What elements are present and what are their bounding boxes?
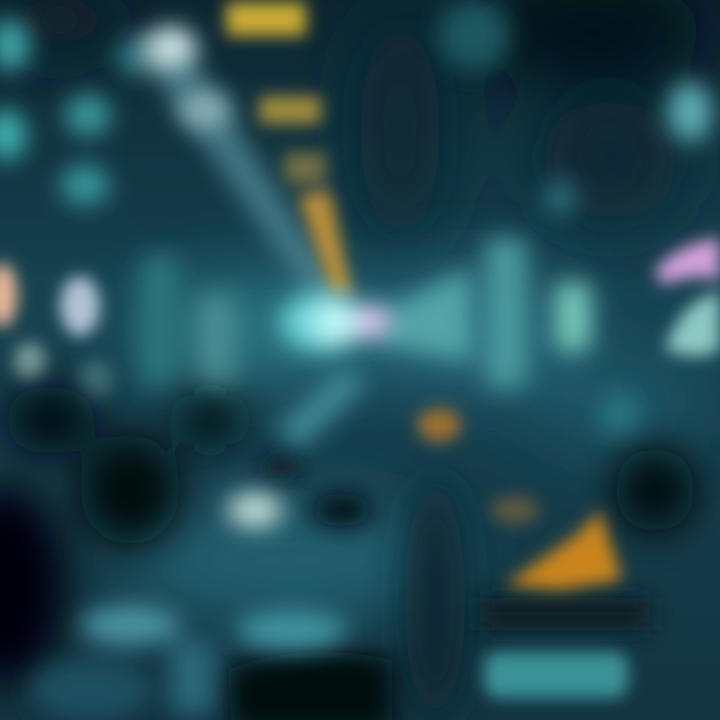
black lower shape: [228, 454, 650, 720]
dark machinery shadows: [0, 386, 695, 720]
teal dots at left: [0, 19, 111, 205]
dark upper-region shadows: [0, 0, 710, 250]
teal mid-band glow: [120, 270, 710, 620]
gold bars: [226, 2, 352, 295]
orange accents: [417, 408, 622, 590]
teal lower panels: [30, 605, 347, 720]
central right fan: [375, 268, 472, 362]
diagonal light beam: [130, 30, 345, 310]
left pale blobs: [0, 263, 113, 400]
pale nodes on beam: [117, 28, 231, 128]
teal rounded bar: [484, 652, 628, 698]
right pink and pale bars: [655, 238, 720, 356]
top-right teal blobs: [438, 0, 712, 437]
pale white blob and diagonal strut: [227, 365, 365, 528]
vertical teal columns: [140, 238, 591, 390]
central glow: [280, 292, 390, 352]
